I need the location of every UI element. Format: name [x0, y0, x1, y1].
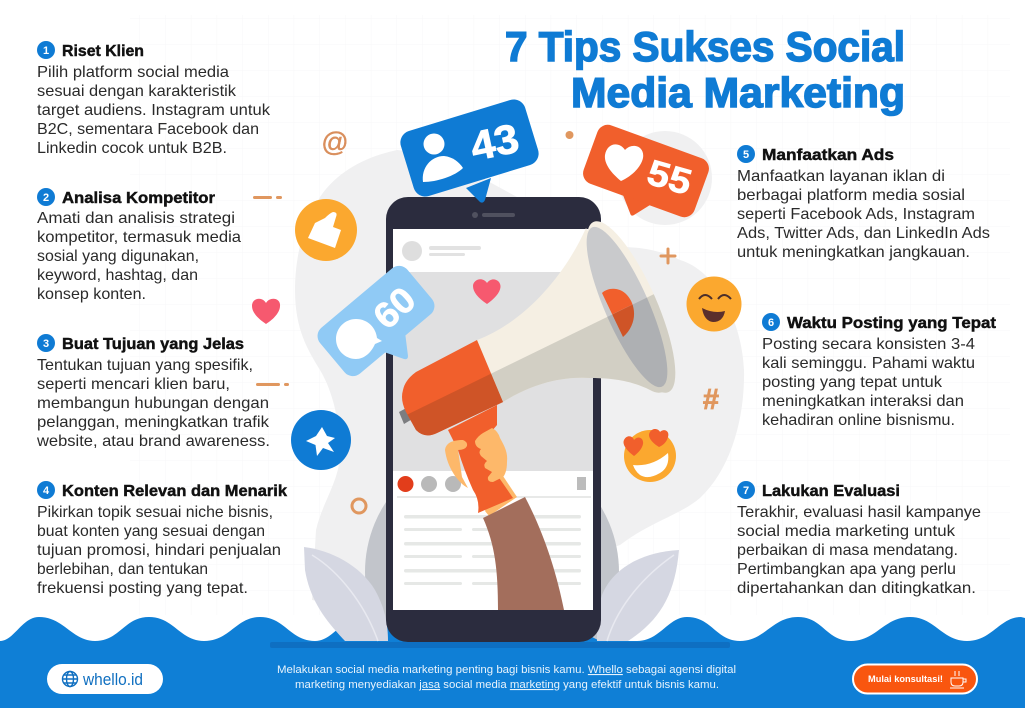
- logo text: whello.id: [82, 670, 143, 689]
- megaphone rear nub: [399, 406, 414, 424]
- bubble body 55: [580, 122, 712, 220]
- body 4: tujuan promosi, hindari penjualan: [37, 542, 281, 559]
- body 4: Pikirkan topik sesuai niche bisnis,: [37, 504, 273, 521]
- handle: [448, 405, 513, 513]
- number badge 6: [762, 313, 780, 331]
- body 1: B2C, sementara Facebook dan: [37, 121, 259, 138]
- body 1: Pilih platform social media: [37, 64, 229, 81]
- phone: [386, 197, 601, 642]
- body 6: kali seminggu. Pahami waktu: [762, 355, 975, 372]
- arm: [483, 497, 564, 610]
- icon: heart-eyes emoji: [623, 429, 676, 482]
- body 3: Tentukan tujuan yang spesifik,: [37, 357, 253, 374]
- bubble: likes 55: [580, 122, 712, 220]
- heading 6: Waktu Posting yang Tepat: [787, 315, 997, 332]
- body 2: keyword, hashtag, dan: [37, 267, 198, 284]
- number badge 2: [37, 188, 55, 206]
- fingers: [475, 428, 507, 482]
- post action dots: [397, 476, 591, 498]
- number 60: 60: [365, 278, 424, 337]
- heading 5: Manfaatkan Ads: [762, 147, 894, 164]
- post image area: [393, 272, 593, 471]
- comment icon: [336, 319, 382, 359]
- number badge 6: 6: [768, 317, 774, 329]
- body 3: pelanggan, meningkatkan trafik: [37, 414, 270, 431]
- wrist and cuff: [485, 476, 517, 516]
- number badge 4: [37, 481, 55, 499]
- right leaf: [597, 550, 679, 641]
- heading 1: Riset Klien: [62, 43, 144, 60]
- megaphone bell: [477, 228, 672, 402]
- heading 2: Analisa Kompetitor: [62, 190, 215, 207]
- tip 1: [37, 41, 271, 157]
- circle behind phone: [365, 445, 619, 699]
- bubble: followers 43: [397, 96, 542, 203]
- icon: coffee cup: [950, 671, 966, 688]
- number badge 3: 3: [43, 338, 49, 350]
- heart icon: [605, 144, 643, 181]
- body 7: social media marketing untuk: [737, 523, 956, 540]
- number badge 5: [737, 145, 755, 163]
- person icon: [423, 134, 463, 182]
- phone body: [386, 197, 601, 642]
- bubble body 43: [397, 96, 542, 203]
- body 3: website, atau brand awareness.: [36, 433, 270, 450]
- bubble body 60: [313, 261, 439, 381]
- tip 3: [36, 334, 270, 450]
- body 4: berlebihan, dan tentukan: [37, 561, 208, 578]
- body 7: dipertahankan dan ditingkatkan.: [737, 580, 976, 597]
- number badge 2: 2: [43, 192, 49, 204]
- megaphone rim: [570, 211, 692, 403]
- body 2: Amati dan analisis strategi: [37, 210, 235, 227]
- icon: hash: #: [703, 384, 719, 416]
- icon: orange ring: [352, 499, 366, 513]
- body 1: sesuai dengan karakteristik: [37, 83, 237, 100]
- body 5: [737, 168, 990, 261]
- megaphone handle and hand: [445, 405, 513, 513]
- title: [505, 23, 905, 116]
- body 5: untuk meningkatkan jangkauan.: [737, 244, 970, 261]
- body 7: Pertimbangkan apa yang perlu: [737, 561, 956, 578]
- body 5: seperti Facebook Ads, Instagram: [737, 206, 975, 223]
- body 6: posting yang tepat untuk: [762, 374, 943, 391]
- post avatar: [402, 241, 481, 261]
- title: 7 Tips Sukses Social: [505, 23, 905, 70]
- phone screen: [393, 229, 593, 610]
- button label: Mulai konsultasi!: [868, 674, 943, 685]
- megaphone body: [402, 340, 503, 435]
- body 5: Ads, Twitter Ads, dan LinkedIn Ads: [737, 225, 990, 242]
- body 1: [37, 64, 271, 157]
- body 1: Linkedin cocok untuk B2B.: [37, 140, 227, 157]
- body 6: Posting secara konsisten 3-4: [762, 336, 975, 353]
- title: Media Marketing: [571, 69, 905, 116]
- phone shadow bar: [270, 642, 730, 648]
- tip 5: [737, 145, 990, 261]
- phone speaker: [472, 212, 515, 218]
- body 1: target audiens. Instagram untuk: [37, 102, 271, 119]
- post text lines: [404, 515, 581, 585]
- body 3: membangun hubungan dengan: [37, 395, 269, 412]
- number badge 4: 4: [43, 485, 50, 497]
- body 6: meningkatkan interaksi dan: [762, 393, 964, 410]
- palm and thumb: [445, 440, 468, 488]
- tip 7: [737, 481, 981, 597]
- bubble: comments 60: [313, 261, 439, 381]
- body 7: perbaikan di masa mendatang.: [737, 542, 958, 559]
- body 6: kehadiran online bisnismu.: [762, 412, 955, 429]
- body 6: [762, 336, 975, 429]
- tip 4: [37, 481, 287, 597]
- body 5: Manfaatkan layanan iklan di: [737, 168, 945, 185]
- number badge 3: [37, 334, 55, 352]
- number badge 7: 7: [743, 485, 749, 497]
- number badge 1: 1: [43, 45, 49, 57]
- logo pill: [47, 664, 163, 694]
- body 3: [36, 357, 270, 450]
- icon: star badge: [291, 410, 351, 470]
- icon: dash middle: [256, 383, 289, 386]
- heading 3: Buat Tujuan yang Jelas: [62, 336, 244, 353]
- icon: thumbs up: [295, 199, 357, 261]
- icon: at sign: @: [321, 127, 349, 157]
- body 2: kompetitor, termasuk media: [37, 229, 241, 246]
- megaphone shaded half: [408, 294, 676, 436]
- megaphone: [399, 211, 692, 435]
- body 4: [37, 504, 281, 597]
- icon: plus: [661, 249, 675, 263]
- number 55: 55: [643, 151, 696, 203]
- icon: globe: [62, 672, 78, 686]
- body 4: frekuensi posting yang tepat.: [37, 580, 248, 597]
- body 7: [737, 504, 981, 597]
- body 2: sosial yang digunakan,: [37, 248, 199, 265]
- heading 4: Konten Relevan dan Menarik: [62, 483, 287, 500]
- tip 6: [762, 313, 997, 429]
- number badge 7: [737, 481, 755, 499]
- footer text: Melakukan social media marketing penting bagi bisnis kamu. Whello sebagai agensi digital: [277, 664, 736, 676]
- body 2: [37, 210, 241, 303]
- icon: laughing emoji: [686, 276, 742, 332]
- tip 2: [37, 188, 241, 303]
- body 7: Terakhir, evaluasi hasil kampanye: [737, 504, 981, 521]
- heading 7: Lakukan Evaluasi: [762, 483, 900, 500]
- body 3: seperti mencari klien baru,: [37, 376, 230, 393]
- number badge 1: [37, 41, 55, 59]
- body 2: konsep konten.: [37, 286, 146, 303]
- number badge 5: 5: [743, 149, 749, 161]
- icon: heart left: [252, 299, 280, 324]
- megaphone inner cone: [572, 218, 682, 396]
- background blob: [295, 131, 744, 620]
- body 4: buat konten yang sesuai dengan: [37, 523, 265, 540]
- footer text: [277, 664, 736, 691]
- icon: dash top: [253, 196, 282, 199]
- wave footer band: [0, 617, 1025, 708]
- megaphone dome: [602, 289, 634, 337]
- call-to-action button: [853, 664, 977, 694]
- number 43: 43: [466, 115, 523, 170]
- icon: heart on post: [473, 279, 501, 304]
- icon: orange dot: [566, 131, 574, 139]
- left leaf: [304, 547, 388, 641]
- footer text: marketing menyediakan jasa social media marketing yang efektif untuk bisnis kamu.: [295, 679, 719, 691]
- body 5: berbagai platform media sosial: [737, 187, 965, 204]
